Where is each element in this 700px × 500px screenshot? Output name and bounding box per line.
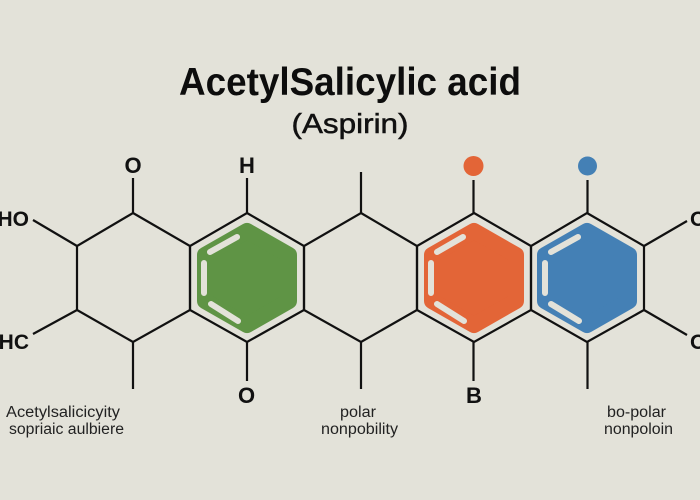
caption center: nonpobility bbox=[321, 421, 398, 438]
blue ring fill bbox=[545, 231, 629, 325]
orange atom dot bbox=[464, 156, 484, 176]
atom label B bottom: B bbox=[466, 383, 482, 408]
atom label O bottom: O bbox=[238, 383, 255, 408]
caption right: bo-polar bbox=[607, 404, 666, 421]
atom label H top: H bbox=[239, 153, 255, 178]
molecule diagram bbox=[33, 172, 687, 389]
caption right: nonpoloin bbox=[604, 421, 673, 438]
caption center bbox=[321, 404, 398, 438]
green ring fill bbox=[204, 231, 289, 325]
title: AcetylSalicylic acid bbox=[179, 61, 521, 104]
caption left bbox=[6, 404, 124, 438]
caption right bbox=[604, 404, 673, 438]
hexagon bonds bbox=[77, 213, 644, 342]
blue atom dot bbox=[578, 156, 597, 176]
atom label O top: O bbox=[124, 153, 142, 178]
substituent bonds bbox=[33, 172, 687, 389]
subtitle: (Aspirin) bbox=[292, 108, 408, 139]
caption center: polar bbox=[340, 404, 376, 421]
caption left: Acetylsalicicyity bbox=[6, 404, 120, 421]
caption left: sopriaic aulbiere bbox=[9, 421, 124, 438]
orange ring fill bbox=[431, 231, 516, 325]
